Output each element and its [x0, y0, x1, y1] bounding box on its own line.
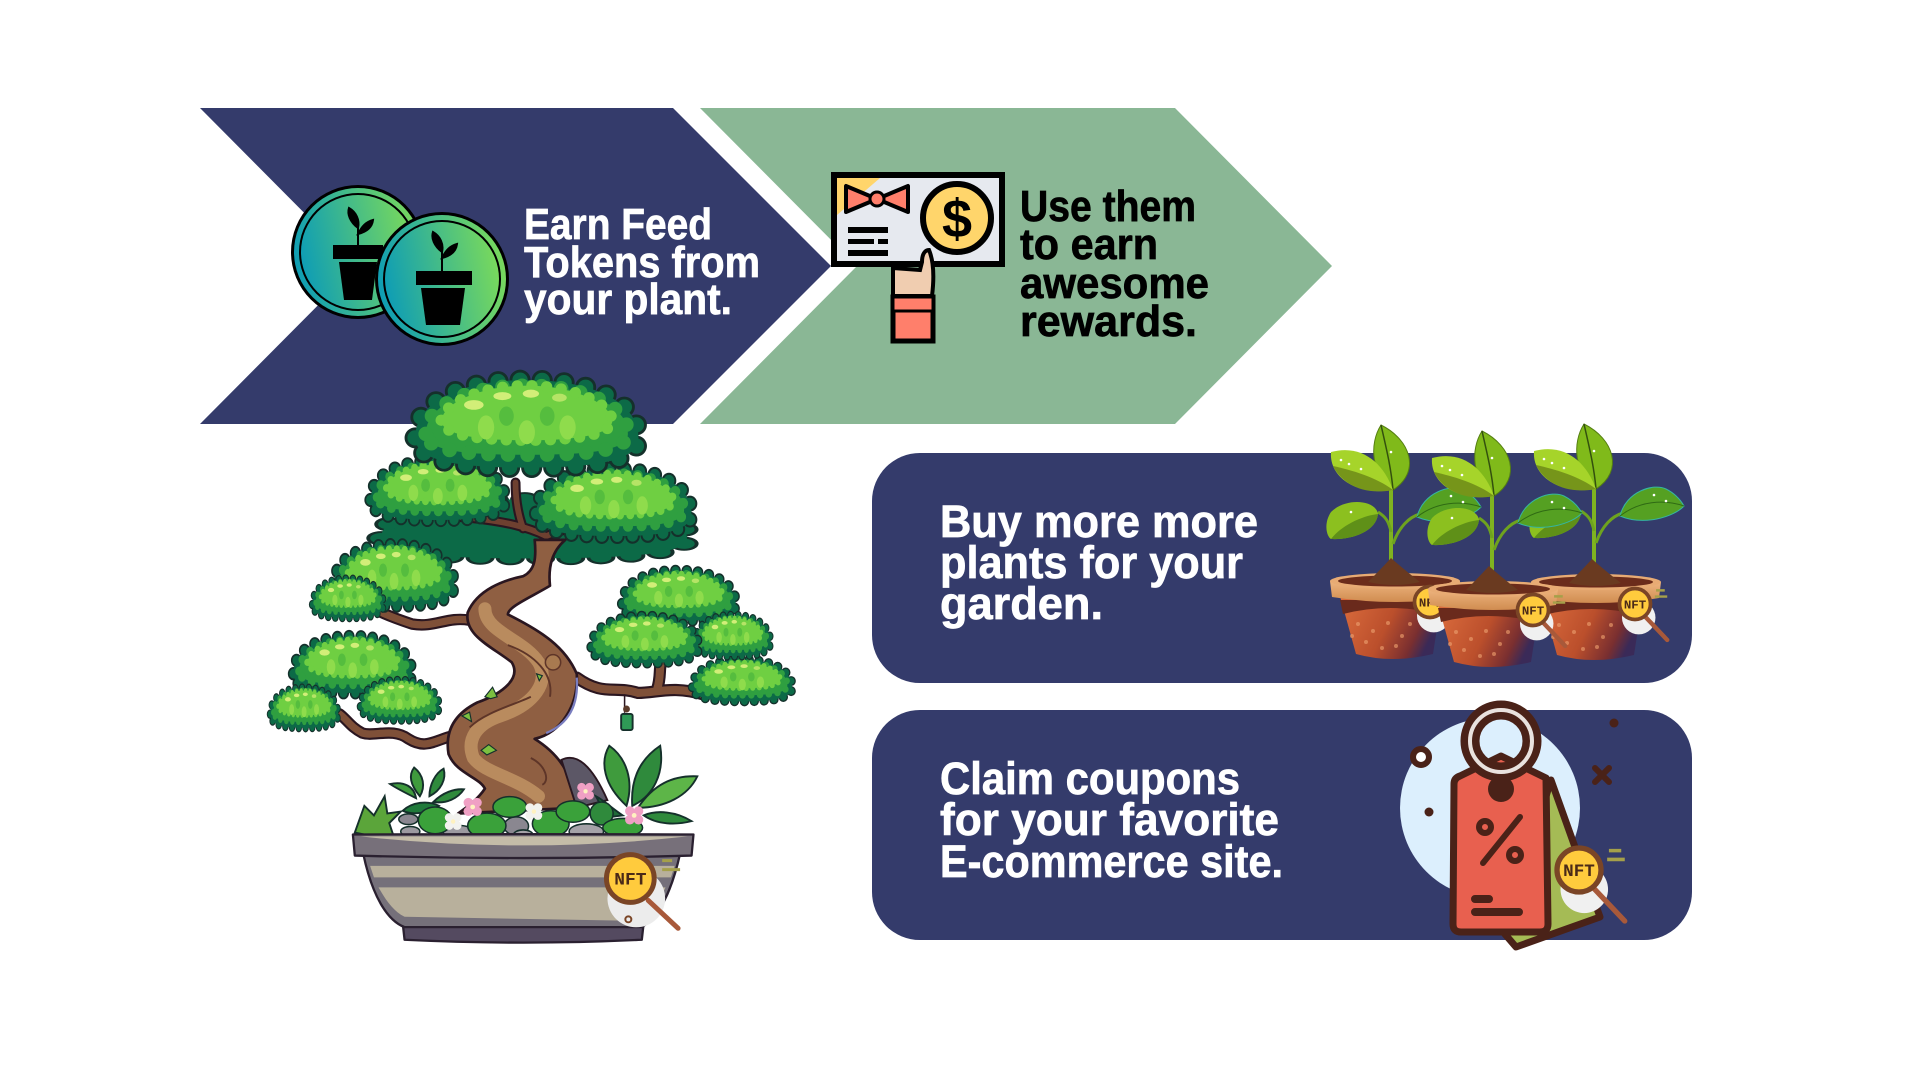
icon: nft magnifier two: NFT: [1522, 604, 1545, 618]
tree branches: [339, 611, 705, 744]
text: claim coupons: [940, 753, 1283, 887]
icon: nft magnifier bonsai: [606, 855, 680, 928]
icon: potted plant two: [1427, 431, 1582, 667]
text: earn feed tokens: Tokens from: [524, 238, 760, 287]
foliage: upper left cluster: [312, 545, 454, 618]
icon: nft magnifier two: [1518, 594, 1565, 646]
foliage: top crown: [415, 380, 638, 468]
icon: nft magnifier bonsai: NFT: [614, 871, 647, 891]
foliage: lower left cluster: [270, 637, 439, 728]
tree trunk: [448, 540, 577, 813]
icon: nft magnifier three: [1620, 588, 1667, 640]
icon: nft magnifier three: NFT: [1624, 598, 1647, 612]
panel: buy more plants: [872, 424, 1692, 683]
stones and moss: [399, 797, 643, 839]
foliage: dark under canopy: [381, 499, 687, 558]
chevron: use tokens for rewards: [700, 108, 1332, 424]
charm: hanging green tag: [621, 706, 633, 730]
text: use them to earn rewards: rewards.: [1020, 297, 1197, 346]
illustration: bonsai tree: [270, 380, 792, 943]
panel: claim coupons: [872, 710, 1692, 947]
icon: gift voucher held in hand: [834, 175, 1002, 341]
icon: nft magnifier coupon: NFT: [1563, 862, 1595, 882]
text: use them to earn rewards: [1020, 182, 1209, 346]
text: use them to earn rewards: to earn: [1020, 220, 1158, 269]
flowers: [445, 783, 643, 830]
plant: right large leaves: [596, 746, 697, 824]
icon: coupon tags: [1400, 710, 1625, 947]
icon: feed token coins: [291, 185, 509, 346]
text: use them to earn rewards: Use them: [1020, 182, 1196, 231]
text: earn feed tokens: [524, 200, 760, 324]
bonsai pot: [353, 834, 693, 943]
foliage: right cluster: [591, 571, 792, 701]
text: earn feed tokens: Earn Feed: [524, 200, 712, 249]
icon: nft magnifier one: NFT: [1419, 596, 1442, 610]
text: buy more plants: plants for your: [940, 537, 1243, 588]
chevron: earn feed tokens: [200, 108, 831, 424]
icon: potted plant three: [1529, 424, 1684, 660]
tree top branches: [458, 482, 611, 536]
icon: nft magnifier one: [1414, 586, 1450, 632]
text: claim coupons: Claim coupons: [940, 753, 1240, 804]
text: dollar sign: $: [942, 189, 972, 249]
plant: left small leaves: [355, 768, 464, 836]
text: claim coupons: for your favorite: [940, 794, 1279, 845]
rock behind trunk: [561, 758, 607, 808]
text: buy more plants: [940, 496, 1258, 629]
text: claim coupons: E-commerce site.: [940, 836, 1283, 887]
text: use them to earn rewards: awesome: [1020, 259, 1209, 308]
icon: nft magnifier coupon: [1557, 848, 1625, 921]
foliage: upper canopy sides: [371, 461, 691, 536]
text: buy more plants: garden.: [940, 578, 1103, 629]
text: buy more plants: Buy more more: [940, 496, 1258, 547]
text: earn feed tokens: your plant.: [524, 275, 732, 324]
icon: potted plant one: [1326, 425, 1481, 659]
